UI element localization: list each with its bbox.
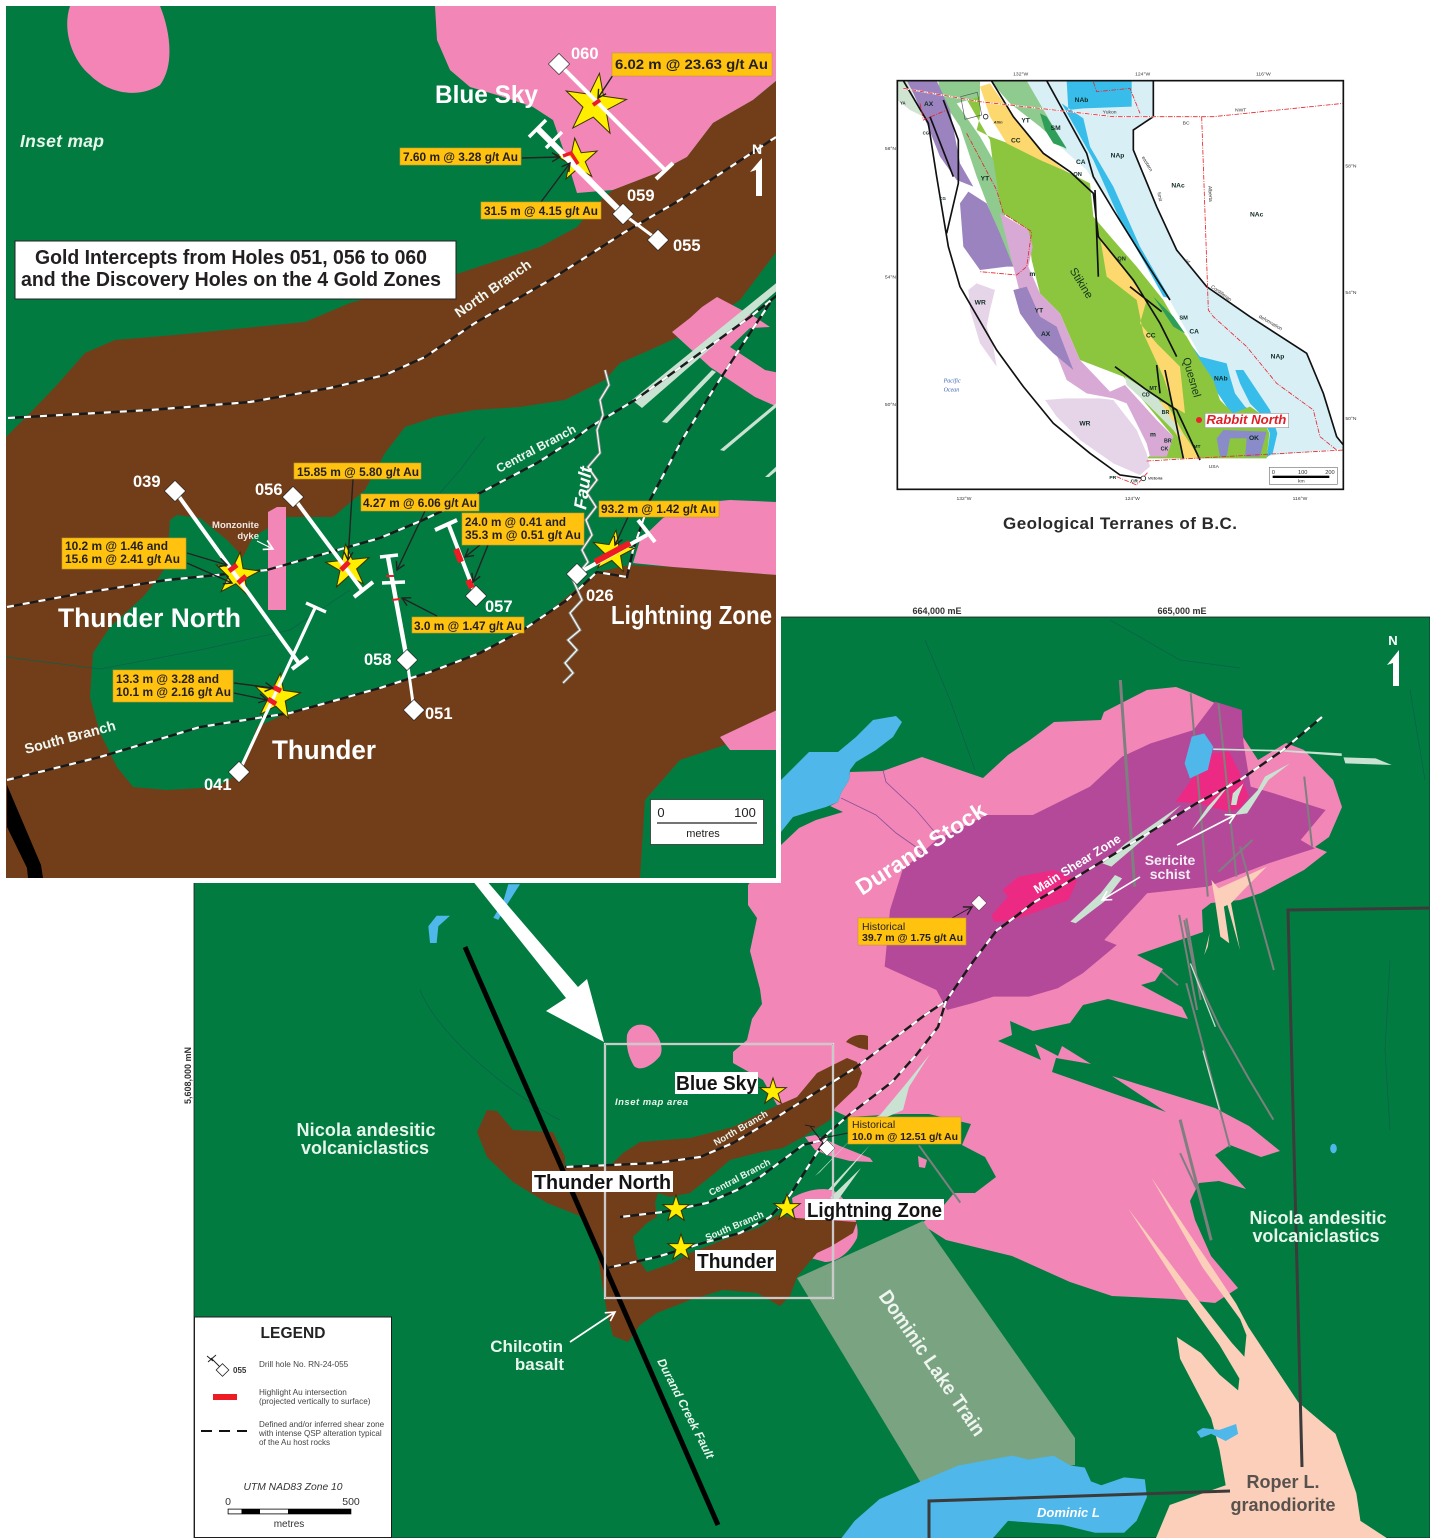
terrane: pale Cadwallader strip	[897, 81, 1183, 437]
terrane labels: YT	[981, 176, 989, 183]
label: Durand Stock: Durand Stock	[851, 797, 991, 900]
inset pink blob top-left	[67, 6, 169, 93]
legend heading: LEGEND	[260, 1325, 326, 1342]
small location rectangle	[961, 92, 982, 119]
label: Roper L. granodiorite: Roper L.	[1246, 1472, 1320, 1492]
terrane: lilac coast belt	[1000, 213, 1173, 457]
legend: projection and scale bar: 500	[342, 1496, 360, 1508]
label: Pacific Ocean: Pacific	[943, 378, 961, 385]
terrane scale bar: 0	[1272, 470, 1275, 476]
inset label: Fault: Fault	[570, 464, 596, 511]
callout: historical 39.7 m: Historical	[862, 921, 905, 933]
hole number labels: 055	[673, 237, 701, 255]
place and map labels: eastern	[1140, 155, 1154, 173]
inset title box: and the Discovery Holes on the 4 Gold Zones	[21, 269, 441, 291]
terrane labels: CG	[939, 196, 946, 201]
label: Lightning Zone: Lightning Zone	[807, 1200, 942, 1222]
terrane labels: MT	[1149, 386, 1158, 392]
terrane scale bar: 200	[1325, 470, 1335, 476]
callout: 13.3 m	[113, 670, 233, 702]
terrane: yellow Cache Creek	[980, 83, 1200, 458]
geology: small blue lakes	[428, 884, 520, 943]
callout arrows	[187, 75, 628, 700]
grid labels: 664,000 mE	[912, 606, 962, 616]
callout: 10.2 m	[62, 538, 186, 569]
terrane: Slide Mountain	[1040, 113, 1185, 333]
legend: projection and scale bar: metres	[274, 1519, 304, 1530]
place and map labels: of	[1183, 258, 1191, 266]
geology: Roper granodiorite	[1128, 1144, 1389, 1538]
terrane map graticule labels: 116°W	[1293, 496, 1308, 502]
callout: 15.85 m: 15.85 m @ 5.80 g/t Au	[297, 465, 419, 479]
inset north arrow: N	[752, 141, 762, 157]
terrane map graticule labels: 116°W	[1256, 71, 1271, 77]
callout: historical 39.7 m: 39.7 m @ 1.75 g/t Au	[862, 932, 963, 944]
terrane labels: QN	[1073, 172, 1082, 178]
hole number labels: 056	[255, 481, 283, 499]
legend: projection and scale bar: 0	[225, 1496, 231, 1508]
terrane labels: WR	[1079, 420, 1091, 427]
terrane labels: CA	[1076, 159, 1086, 166]
place and map labels: USA	[1209, 464, 1220, 470]
terrane: Okanagan	[1217, 430, 1267, 457]
hole number labels: 051	[425, 705, 453, 723]
inset branch labels: North Branch	[452, 256, 534, 320]
terrane labels: BR	[1164, 438, 1172, 444]
terrane labels: PR	[1109, 475, 1117, 481]
place and map labels: Atlin	[993, 119, 1003, 124]
hole number labels: 026	[586, 587, 614, 605]
terrane labels: AX	[924, 101, 934, 108]
label: Thunder: Thunder	[697, 1251, 774, 1273]
terrane labels: NAb	[1075, 97, 1088, 104]
hole number labels: 039	[133, 473, 161, 491]
terrane labels: CA	[1189, 328, 1199, 335]
terrane map graticule labels: 54°N	[885, 274, 896, 280]
terrane labels: CC	[1011, 137, 1021, 144]
inset map area rectangle	[605, 1044, 833, 1298]
label: Roper L. granodiorite: granodiorite	[1230, 1495, 1336, 1515]
callout: 6.02 m	[612, 53, 772, 76]
inset zone names: Thunder North	[58, 603, 241, 633]
panel: legend	[194, 1317, 392, 1538]
legend item: shear zone: Defined and/or inferred shear zone	[259, 1420, 385, 1429]
labels: branches on main map: North Branch	[712, 1109, 770, 1149]
inset pink lobes east	[633, 500, 777, 750]
inset title box	[15, 241, 456, 299]
label: Nicola east: volcaniclastics	[1252, 1226, 1380, 1246]
label: Nicola west: volcaniclastics	[301, 1138, 429, 1158]
terrane: green Stikine and Quesnel	[957, 82, 1269, 458]
legend item: Au intersection: (projected vertically to surface)	[259, 1397, 371, 1406]
legend item: Au intersection: Highlight Au intersection	[259, 1388, 347, 1397]
geology: hot pink alteration	[992, 752, 1249, 922]
label: Dominic Lake Train: Dominic Lake Train	[874, 1286, 989, 1441]
inset scale bar: 0	[657, 805, 665, 820]
label: Dominic L: Dominic L	[1037, 1505, 1100, 1520]
geology: pink lobe beside Lightning Zone	[792, 1189, 858, 1262]
terrane: purple Alexander	[907, 81, 1073, 370]
terrane scale bar	[1269, 467, 1337, 485]
terrane labels	[900, 97, 1284, 484]
geology: small brown blob	[846, 1035, 868, 1050]
callout: 4.27 m: 4.27 m @ 6.06 g/t Au	[363, 496, 477, 510]
geology: pale wedges near historical hole	[815, 1054, 930, 1200]
callout: 6.02 m: 6.02 m @ 23.63 g/t Au	[615, 56, 768, 72]
inset scale bar	[650, 800, 764, 844]
inset wavy fault	[563, 370, 609, 683]
inset label: Monzonite dyke	[212, 520, 273, 549]
inset north arrow	[750, 141, 762, 196]
terrane labels: CC	[1146, 332, 1156, 339]
place and map labels: Victoria	[1148, 475, 1163, 480]
legend item: drill hole: 055	[233, 1366, 247, 1375]
place and map labels: deformation	[1257, 314, 1283, 332]
terrane labels: NAc	[1250, 212, 1264, 219]
hole 060	[548, 53, 673, 179]
label: Stikine: Stikine	[1067, 266, 1095, 301]
label: Sericite schist with arrows: schist	[1150, 866, 1191, 882]
terrane labels: CR	[1131, 478, 1138, 484]
inset brown basalt	[6, 78, 780, 878]
labels: branches on main map: Central Branch	[707, 1157, 773, 1199]
north arrow main map: N	[1388, 633, 1398, 648]
label: Main Shear Zone: Main Shear Zone	[1031, 832, 1123, 897]
inset pink Blue Sky area	[435, 6, 777, 193]
red boundary lines of B.C.	[903, 82, 1343, 485]
terrane map caption: Geological Terranes of B.C.	[1003, 514, 1237, 533]
property boundary lines	[929, 908, 1430, 1538]
geology: purple quartz monzonite	[885, 702, 1326, 1010]
place and map labels: BC	[1183, 121, 1190, 127]
geology: small pink intrusive blob	[627, 1025, 662, 1068]
labels: branches on main map	[704, 1109, 773, 1244]
place and map labels: Alberta	[1206, 186, 1213, 202]
place and map labels	[993, 107, 1283, 480]
terrane: Wrangellia	[968, 283, 1150, 475]
callout: historical 10.0 m: Historical	[852, 1119, 895, 1131]
terrane labels: CK	[1161, 447, 1169, 453]
legend item: drill hole	[207, 1355, 349, 1376]
terrane labels: SM	[1179, 315, 1188, 321]
inset branch labels: South Branch	[23, 718, 118, 758]
callout: 3.0 m: 3.0 m @ 1.47 g/t Au	[414, 619, 522, 633]
inset scale bar: 100	[734, 805, 756, 820]
labels: branches on main map: South Branch	[704, 1209, 766, 1244]
terrane map graticule labels: 50°N	[1345, 416, 1357, 422]
label: Roper L. granodiorite	[1230, 1472, 1336, 1515]
inset title box: Gold Intercepts from Holes 051, 056 to 060	[35, 247, 427, 269]
label: Pacific Ocean: Ocean	[944, 387, 959, 393]
hole number labels: 059	[627, 187, 655, 205]
inset zone names: Thunder	[272, 735, 376, 765]
place and map labels: NWT	[1235, 107, 1246, 113]
label: Pacific Ocean	[943, 378, 961, 393]
terrane: NAb blue	[1062, 81, 1277, 457]
terrane scale bar: km	[1298, 479, 1305, 485]
terrane: pale green Yukon-Tanana	[938, 81, 1067, 270]
terrane map graticule labels: 132°W	[956, 496, 972, 502]
terrane labels: YT	[1035, 308, 1043, 315]
place and map labels: Cordilleran	[1209, 284, 1233, 303]
label: Chilcotin basalt with arrow: basalt	[515, 1355, 564, 1374]
geology: blue lake inside stock	[1185, 733, 1213, 778]
callout: historical 10.0 m	[848, 1117, 961, 1144]
label: Nicola east	[1250, 1208, 1386, 1246]
callout: historical 10.0 m: 10.0 m @ 12.51 g/t Au	[852, 1131, 958, 1143]
callout: 13.3 m: 10.1 m @ 2.16 g/t Au	[116, 685, 231, 699]
geology: Dominic Lake Train	[797, 1221, 1075, 1483]
label: Chilcotin basalt with arrow: Chilcotin	[490, 1337, 563, 1356]
historical hole near Lightning Zone	[805, 1125, 848, 1156]
geology: Dominic Lake	[840, 1456, 1147, 1538]
terrane map graticule labels: 58°N	[885, 146, 896, 152]
holes 059 and 055	[529, 120, 669, 251]
inset branch labels	[23, 256, 578, 758]
geology: grey dykes	[1120, 680, 1312, 1010]
geology: sericite schist pale strips	[1070, 748, 1392, 923]
callout: 10.2 m: 10.2 m @ 1.46 and	[65, 539, 168, 553]
terrane labels: BR	[1162, 410, 1170, 416]
hole number labels	[133, 45, 701, 794]
terrane map graticule labels: 50°N	[885, 402, 896, 408]
terrane labels: NAb	[1214, 376, 1228, 383]
label: Nicola west: Nicola andesitic	[296, 1120, 436, 1140]
hole 039	[164, 480, 308, 669]
grid labels: 5,608,000 mN	[183, 1047, 193, 1104]
panel: terrane map of B.C.	[885, 71, 1357, 502]
geology: stream lines on stock	[841, 770, 982, 880]
terrane labels: QN	[1117, 257, 1126, 263]
panel: main geological map	[183, 606, 1430, 1538]
geology: peach dykes in stock	[1204, 867, 1267, 955]
legend item: shear zone: of the Au host rocks	[259, 1438, 330, 1447]
Durand Creek Fault line	[465, 947, 718, 1525]
terrane map graticule labels: 58°N	[1345, 164, 1357, 170]
label: Quesnel: Quesnel	[1180, 356, 1203, 399]
label: Durand Creek Fault: Durand Creek Fault	[654, 1356, 718, 1462]
label: Nicola east: Nicola andesitic	[1250, 1208, 1386, 1228]
inset drainage	[6, 437, 485, 669]
inset label: Monzonite dyke: Monzonite	[212, 520, 259, 531]
terrane map graticule labels: 124°W	[1135, 71, 1150, 77]
legend item: drill hole: Drill hole No. RN-24-055	[259, 1360, 349, 1369]
terrane labels: YT	[1021, 118, 1030, 125]
terrane labels: AX	[1041, 331, 1051, 338]
label: Chilcotin basalt with arrow	[490, 1312, 615, 1374]
inset monzonite dyke	[268, 507, 286, 610]
callout: 24.0 m	[462, 513, 584, 545]
callout: historical 39.7 m	[858, 895, 987, 945]
terrane map frame	[897, 81, 1343, 489]
hole number labels: 060	[571, 45, 599, 63]
callout: 24.0 m: 35.3 m @ 0.51 g/t Au	[465, 528, 581, 542]
arrow: inset pointer	[472, 880, 604, 1042]
hole 056	[282, 486, 373, 597]
holes 058 and 051	[380, 555, 425, 721]
grid labels	[183, 606, 1207, 1104]
hole 026	[566, 520, 655, 585]
legend: projection and scale bar	[225, 1482, 360, 1530]
panel: inset map	[0, 0, 781, 883]
terrane labels: SM	[1051, 125, 1061, 132]
terrane labels: CD	[1142, 393, 1150, 399]
terrane labels: NAp	[1111, 152, 1124, 159]
inset label: Monzonite dyke: dyke	[237, 531, 259, 542]
terrane: light blue North America platform	[1020, 81, 1343, 456]
hole 041	[228, 603, 326, 783]
inset zone names: Lightning Zone	[611, 600, 772, 630]
label: Nicola west	[296, 1120, 436, 1158]
inset pale sericite strips	[632, 280, 780, 477]
geology: pink Durand Stock intrusive	[733, 687, 1342, 1303]
inset stars	[213, 69, 637, 719]
terrane labels: CG	[923, 130, 930, 135]
terrane scale bar: 100	[1298, 470, 1307, 476]
terrane labels: MT	[1193, 444, 1201, 450]
label: Thunder North: Thunder North	[534, 1172, 671, 1194]
geology: blue lake north	[781, 716, 902, 832]
marker: Rabbit North: Rabbit North	[1206, 412, 1286, 427]
label: Sericite schist with arrows: Sericite	[1145, 852, 1196, 868]
place and map labels: Yukon	[1103, 109, 1117, 115]
callout: 31.5 m: 31.5 m @ 4.15 g/t Au	[484, 204, 598, 218]
geology: pink tip by historical hole	[805, 1135, 927, 1168]
inset zone names	[58, 81, 772, 765]
terrane labels: NAc	[1171, 182, 1185, 189]
terrane faults and deformation limit	[903, 78, 1343, 478]
callout: 13.3 m: 13.3 m @ 3.28 and	[116, 672, 219, 686]
hole 057	[435, 520, 487, 607]
label: inset map area: Inset map area	[615, 1097, 688, 1108]
terrane labels: m	[1150, 432, 1156, 439]
legend item: shear zone: with intense QSP alteration typical	[258, 1429, 382, 1438]
inset zone names: Blue Sky	[435, 81, 538, 109]
callout: 93.2 m: 93.2 m @ 1.42 g/t Au	[601, 502, 716, 516]
hole number labels: 041	[204, 776, 232, 794]
terrane map graticule labels	[885, 71, 1357, 502]
terrane map graticule labels: 132°W	[1013, 71, 1028, 77]
terrane map graticule labels: 54°N	[1345, 290, 1357, 296]
inset pink band by shear zone	[672, 297, 780, 408]
callout: 10.2 m: 15.6 m @ 2.41 g/t Au	[65, 552, 180, 566]
inset shear zones	[7, 137, 780, 780]
terrane map graticule labels: 124°W	[1125, 496, 1140, 502]
terrane labels: WR	[975, 299, 986, 306]
grid labels: 665,000 mE	[1157, 606, 1207, 616]
shear zones main map	[565, 717, 1322, 1268]
callout: 24.0 m: 24.0 m @ 0.41 and	[465, 515, 566, 529]
legend item: shear zone	[201, 1420, 385, 1447]
callout: 7.60 m: 7.60 m @ 3.28 g/t Au	[403, 150, 518, 164]
inset scale bar: metres	[686, 828, 720, 840]
inset black fault corner	[7, 785, 43, 878]
terrane labels: OK	[1249, 435, 1259, 442]
north arrow main map	[1387, 633, 1399, 686]
geology: brown Chilcotin basalt	[477, 1058, 862, 1342]
terrane labels: m	[1029, 271, 1035, 278]
inset label: Inset map: Inset map	[20, 131, 104, 151]
legend: projection and scale bar: UTM NAD83 Zone 10	[243, 1482, 343, 1493]
terrane labels: YA	[900, 100, 906, 105]
legend item: Au intersection	[213, 1388, 371, 1406]
label: Sericite schist with arrows	[1102, 815, 1235, 900]
hole number labels: 058	[364, 651, 392, 669]
place and map labels: limit	[1155, 192, 1163, 202]
label: Blue Sky: Blue Sky	[676, 1073, 758, 1095]
zone stars main map	[663, 1078, 800, 1259]
hole number labels: 057	[485, 598, 513, 616]
inset branch labels: Central Branch	[494, 422, 578, 476]
terrane labels: NAp	[1271, 353, 1284, 360]
